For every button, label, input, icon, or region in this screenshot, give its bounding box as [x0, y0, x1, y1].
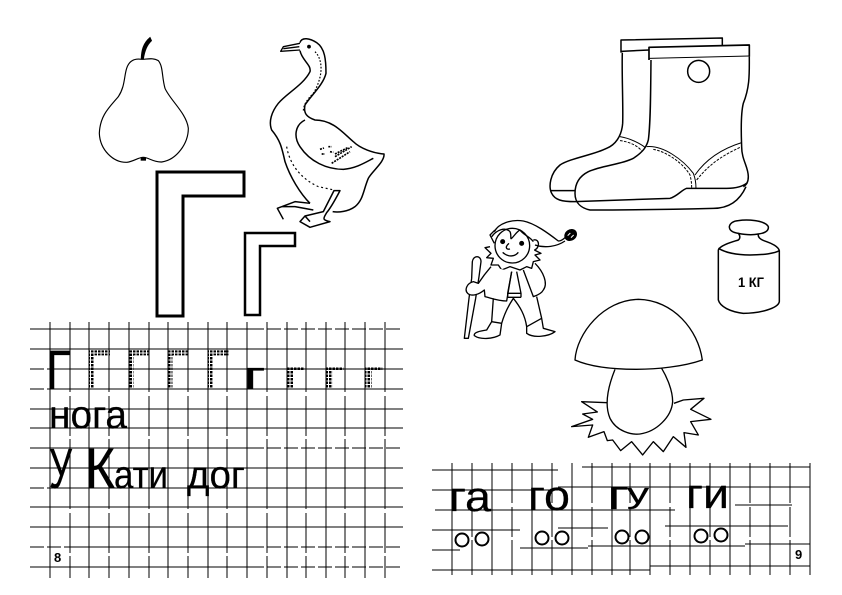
dotted capital Г tracing row: Г	[125, 338, 150, 401]
sentence: У Кати дог: К	[85, 437, 115, 501]
dotted lowercase г tracing row: г	[322, 354, 344, 398]
letter г lowercase outline	[245, 233, 295, 315]
dotted capital Г tracing row: Г	[86, 338, 110, 401]
panel: right page illustrations	[464, 38, 779, 455]
dotted capital Г tracing row: Г	[164, 338, 189, 401]
panel: right page syllable practice	[449, 470, 802, 562]
panel: right ruled grid	[432, 463, 810, 575]
dotted lowercase г tracing row: г	[284, 354, 306, 398]
icon: 1 kg weight: 1 КГ	[738, 275, 764, 290]
solid lowercase г: г	[244, 354, 266, 398]
icon: goose	[270, 39, 384, 227]
panel: left ruled grid	[30, 322, 403, 578]
sentence: У Кати дог: У	[49, 437, 72, 501]
sound circles	[456, 528, 728, 546]
icon: 1 kg weight	[718, 220, 779, 313]
panel: left page writing practice	[46, 338, 384, 565]
syllable: гу	[607, 471, 650, 518]
syllable: гу: у	[627, 478, 650, 510]
syllable: го: го	[528, 472, 570, 519]
icon: gnome with staff	[464, 221, 578, 338]
sentence: У Кати дог	[49, 437, 245, 501]
sentence: У Кати дог: ати	[114, 454, 168, 497]
syllable: га: га	[449, 473, 492, 520]
page number 9: 9	[795, 547, 802, 562]
syllable: ги: ги	[686, 470, 729, 517]
icon: pear	[99, 38, 188, 162]
icon: mushroom with grass	[572, 299, 711, 455]
word: нога: нога	[49, 394, 127, 437]
solid capital Г: Г	[46, 338, 71, 401]
dotted lowercase г tracing row	[284, 354, 384, 398]
page number 8: 8	[54, 550, 61, 565]
letter Г uppercase outline	[157, 172, 244, 316]
dotted capital Г tracing row	[86, 338, 229, 401]
panel: left page illustrations	[99, 38, 384, 316]
icon: boots	[550, 38, 749, 210]
dotted capital Г tracing row: Г	[204, 338, 229, 401]
syllable: гу: г	[607, 471, 629, 518]
dotted lowercase г tracing row: г	[362, 354, 384, 398]
sentence: У Кати дог: дог	[187, 454, 245, 497]
